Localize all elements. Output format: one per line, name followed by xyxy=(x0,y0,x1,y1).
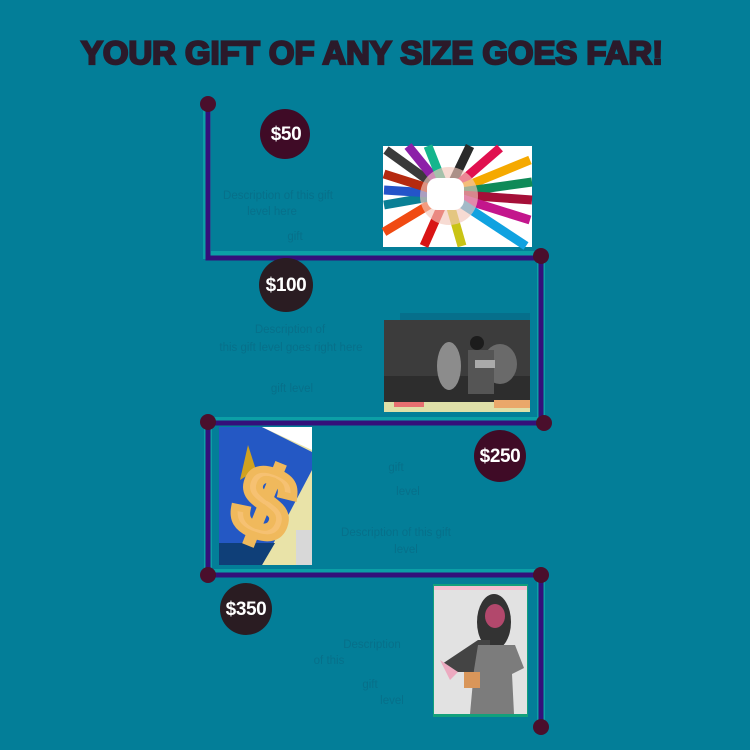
amount badge: $250 xyxy=(474,430,526,482)
amount badge: $100: $100 xyxy=(266,275,306,296)
timeline path xyxy=(200,96,552,735)
description: $250: level xyxy=(394,544,418,556)
amount badge: $50 xyxy=(260,109,310,159)
amount badge: $350 xyxy=(220,583,272,635)
description: $50 xyxy=(223,190,334,243)
timeline nodes xyxy=(200,96,552,735)
description: $350: gift xyxy=(362,679,378,691)
title: YOUR GIFT OF ANY SIZE GOES FAR! xyxy=(81,35,663,71)
panel: $50 gift xyxy=(223,109,532,247)
amount badge: $350: $350 xyxy=(226,599,266,620)
photo: people on dark background xyxy=(384,313,530,412)
amount badge: $100 xyxy=(259,258,313,312)
description: $250: level xyxy=(396,486,420,498)
photo: gold dollar sign: $ xyxy=(218,441,311,566)
description: $50: gift xyxy=(287,231,303,243)
description: $50: level here xyxy=(247,206,297,218)
photo: coloured pencils xyxy=(383,146,532,247)
description: $250: Description of this gift xyxy=(341,527,452,539)
amount badge: $250: $250 xyxy=(480,446,520,467)
description: $250 xyxy=(341,462,452,556)
description: $50: Description of this gift xyxy=(223,190,334,202)
amount badge: $50: $50 xyxy=(271,124,301,145)
description: $100: gift level xyxy=(271,383,313,395)
panel: $100 gift xyxy=(219,258,530,412)
description: $350: of this xyxy=(314,655,345,667)
description: $350: level xyxy=(380,695,404,707)
description: $350 xyxy=(314,639,404,707)
description: $350: Description xyxy=(343,639,401,651)
panel: $350 gift xyxy=(220,583,528,717)
description: $100 xyxy=(219,324,363,395)
description: $100: this gift level goes right here xyxy=(219,342,363,354)
photo: woman in grey t-shirt xyxy=(433,584,528,717)
panel: $250 gift xyxy=(218,427,526,566)
description: $250: gift xyxy=(388,462,404,474)
description: $100: Description of xyxy=(255,324,326,336)
